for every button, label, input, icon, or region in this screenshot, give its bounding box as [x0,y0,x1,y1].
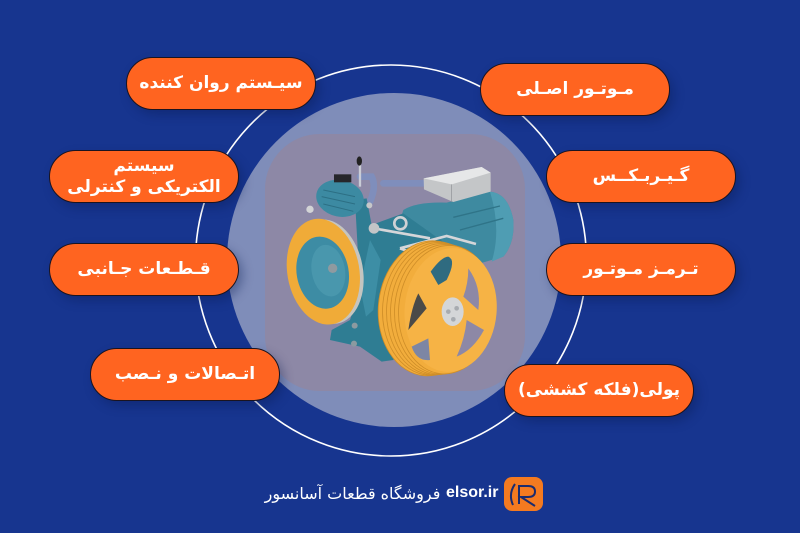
label: right 2: گـیـربـکــس [593,166,689,186]
label: left 2 [49,150,239,203]
faint shadow marks [360,177,423,202]
eye bolt and bracket [394,217,406,229]
pulley hub [442,297,464,326]
label: left 4: اتـصالات و نـصب [115,364,255,384]
label: right 3: تـرمـز مـوتـور [583,259,699,279]
disc edge [285,214,372,330]
elevator gearless motor illustration [279,156,514,380]
label: right 1: مـوتـور اصـلی [516,79,634,99]
rounded square backdrop [265,134,525,391]
motor body [393,192,514,263]
terminal box [424,167,491,202]
label: right 1 [480,63,670,116]
label: left 2: الکتریکی و کنترلی [67,176,221,196]
pulley grooves [373,236,500,380]
connecting ring [196,65,586,456]
label: right 2 [546,150,736,203]
label: right 4 [504,364,694,417]
label: left 3: قـطـعات جـانبی [77,259,211,279]
shop tagline: فروشگاه قطعات آسانسور [265,484,440,503]
footer brand [264,477,543,511]
disc yellow rim [279,213,368,330]
light circle backdrop [227,93,561,427]
lever [356,165,363,187]
logo icon [504,477,543,511]
disc teal recess [291,232,355,313]
gearbox housing [330,198,473,362]
label: left 2: سیستم [113,156,175,176]
left brake disc [279,213,372,330]
label: left 1: سیـستم روان کننده [139,73,303,93]
label: right 4: پولی(فلکه کششی) [518,380,680,400]
label: right 3 [546,243,736,296]
pulley windows [431,257,452,285]
label: left 3 [49,243,239,296]
site name: elsor.ir [446,484,498,501]
traction pulley [373,236,502,380]
pulley face [399,244,502,376]
label: left 4 [90,348,280,401]
small brake motor [313,175,367,221]
label: left 1 [126,57,316,110]
